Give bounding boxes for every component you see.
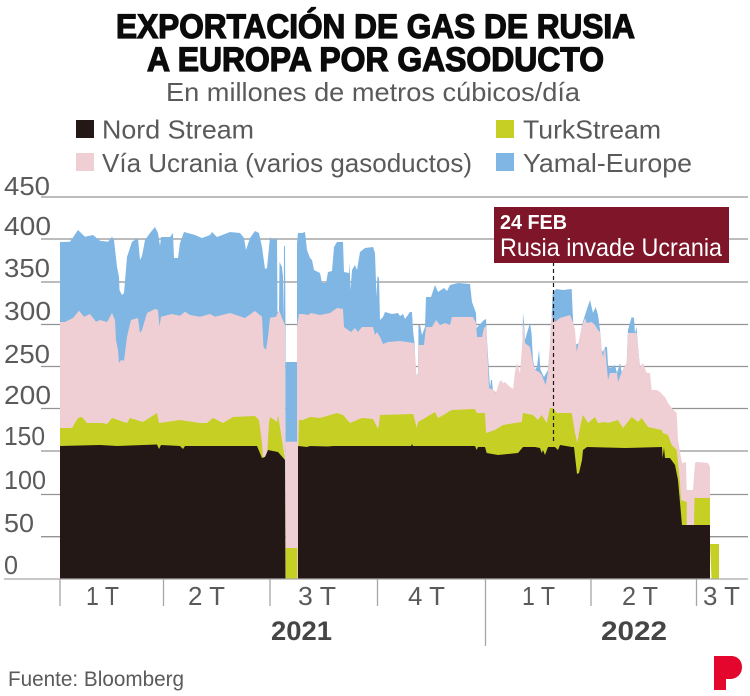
callout: 24 FEB: Rusia invade Ucrania bbox=[500, 234, 722, 262]
title: A EUROPA POR GASODUCTO bbox=[147, 41, 604, 79]
area: Nord Stream bbox=[60, 444, 710, 579]
y axis labels: 50 bbox=[4, 508, 34, 538]
area: TurkStream bbox=[60, 408, 719, 579]
legend item: TurkStream: TurkStream bbox=[523, 114, 661, 144]
legend bbox=[76, 114, 692, 178]
title: EXPORTACIÓN DE GAS DE RUSIA bbox=[116, 8, 635, 46]
y axis labels: 200 bbox=[4, 380, 51, 410]
y axis labels: 250 bbox=[4, 339, 50, 369]
callout: 24 FEB bbox=[494, 207, 729, 263]
x axis quarter labels: 1 T bbox=[86, 581, 119, 611]
icon: P logo bbox=[714, 656, 742, 690]
legend item: Yamal-Europe: Yamal-Europe bbox=[523, 148, 692, 178]
x axis quarter labels: 3 T bbox=[298, 581, 336, 611]
y axis labels: 400 bbox=[4, 211, 51, 241]
callout: 24 FEB: 24 FEB bbox=[500, 212, 567, 234]
source: Fuente: Bloomberg bbox=[8, 668, 184, 691]
legend item: Vía Ucrania: Vía Ucrania (varios gasoductos) bbox=[102, 148, 472, 178]
x axis quarter labels: 2 T bbox=[622, 581, 658, 611]
subtitle: En millones de metros cúbicos/día bbox=[166, 77, 581, 107]
x axis quarter labels: 4 T bbox=[408, 581, 445, 611]
x axis quarter labels bbox=[86, 581, 740, 611]
y axis labels: 150 bbox=[4, 421, 45, 451]
stacked area chart bbox=[60, 227, 719, 579]
x axis quarter labels: 3 T bbox=[703, 581, 740, 611]
year label 2022: 2022 bbox=[601, 616, 667, 646]
year label 2021: 2021 bbox=[271, 616, 332, 646]
y axis labels: 300 bbox=[4, 296, 51, 326]
y axis labels bbox=[4, 171, 51, 580]
area: Yamal-Europe bbox=[60, 227, 640, 579]
y axis labels: 0 bbox=[4, 550, 18, 580]
title bbox=[116, 8, 635, 79]
area: Vía Ucrania bbox=[60, 308, 710, 579]
x axis quarter labels: 1 T bbox=[522, 581, 555, 611]
y axis labels: 100 bbox=[4, 465, 46, 495]
y axis labels: 350 bbox=[4, 253, 50, 283]
y axis labels: 450 bbox=[4, 171, 50, 201]
invasion marker dashed line bbox=[552, 262, 554, 442]
x axis quarter labels: 2 T bbox=[188, 581, 225, 611]
legend item: Nord Stream: Nord Stream bbox=[102, 114, 254, 144]
